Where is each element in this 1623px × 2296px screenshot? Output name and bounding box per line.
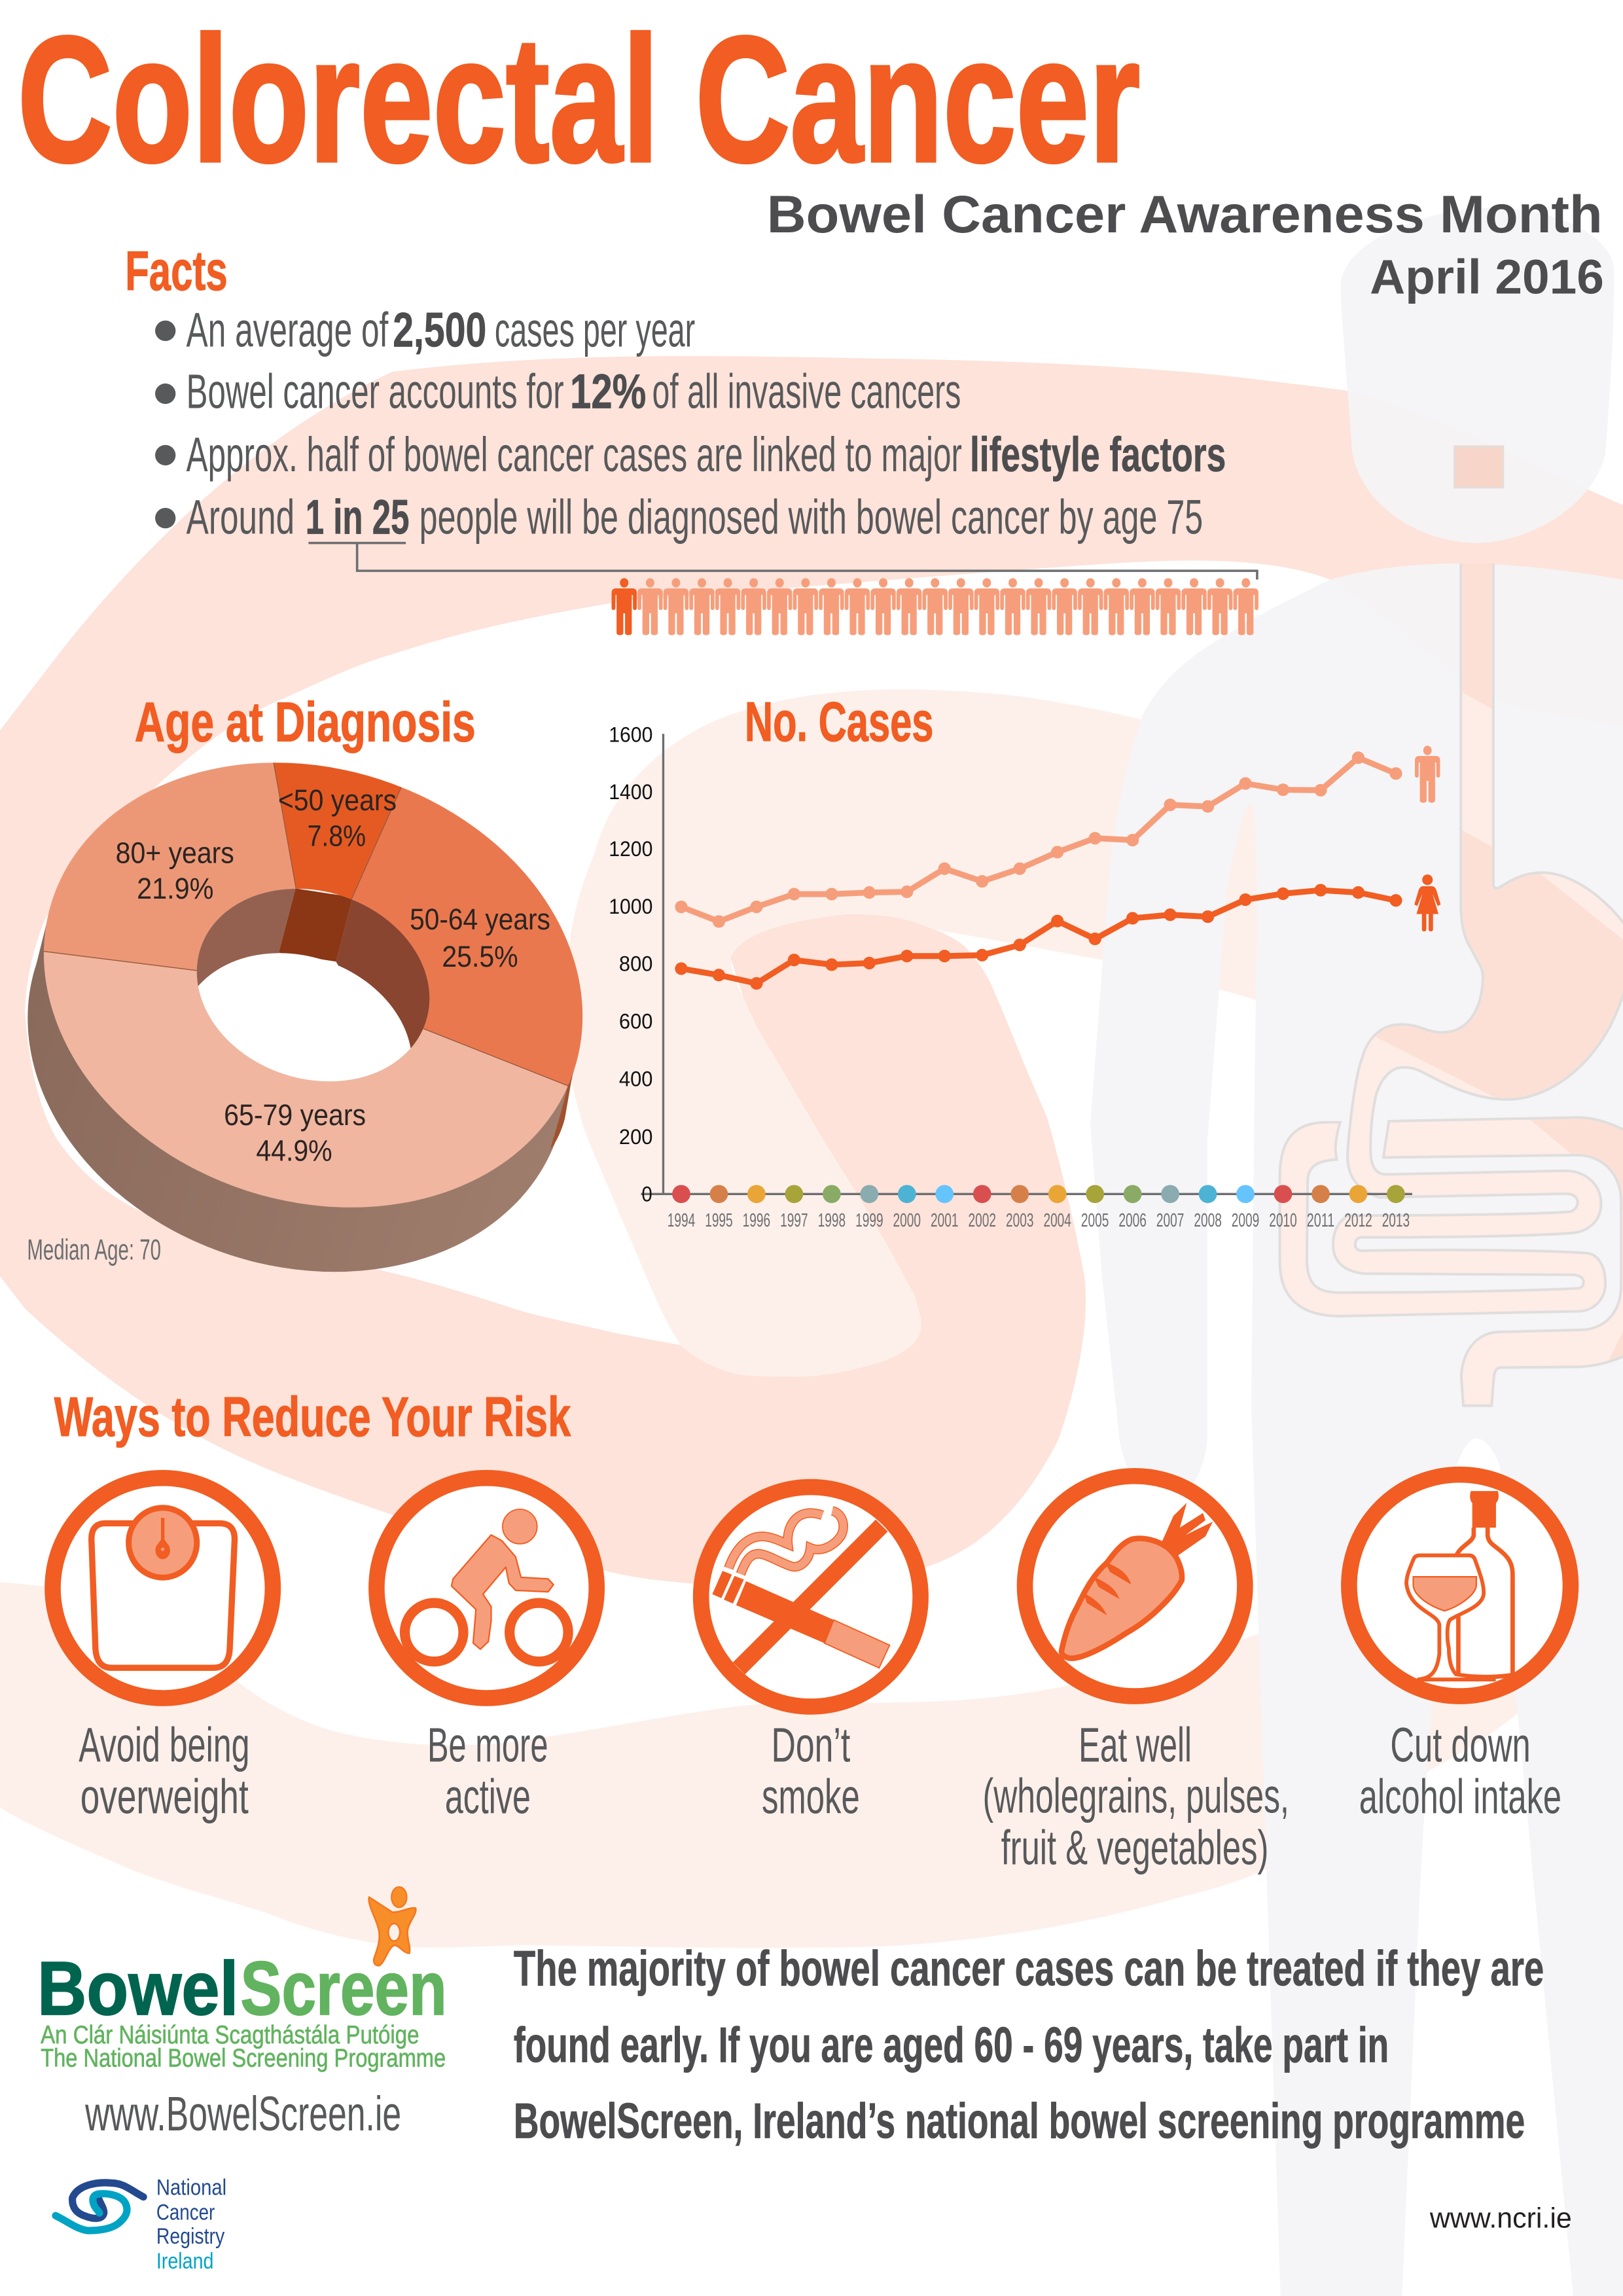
caption: be more active: Be more bbox=[427, 1717, 548, 1772]
organisation name: Ireland bbox=[156, 2249, 213, 2274]
x axis year dots bbox=[672, 1185, 1405, 1203]
organisation name: Registry bbox=[156, 2224, 225, 2249]
y axis labels: 1000 bbox=[609, 895, 652, 918]
x axis year labels: 1997 bbox=[780, 1210, 808, 1231]
background: pale middle band bbox=[569, 689, 1623, 1377]
fact: average cases: An average of bbox=[187, 302, 389, 357]
connector bracket bbox=[308, 543, 1257, 580]
x axis year labels: 1996 bbox=[743, 1210, 770, 1231]
organisation name: National bbox=[156, 2176, 226, 2200]
label: 80 plus: 21.9% bbox=[137, 872, 213, 905]
caption: eat well bbox=[983, 1717, 1289, 1875]
x axis year labels: 2003 bbox=[1006, 1210, 1033, 1231]
caption: don't smoke bbox=[762, 1717, 860, 1823]
y axis labels bbox=[609, 723, 652, 1206]
x axis year labels: 2000 bbox=[893, 1210, 921, 1231]
x axis year labels: 2013 bbox=[1382, 1210, 1410, 1231]
logo: National Cancer Registry Ireland bbox=[56, 2176, 226, 2274]
fact: average cases: cases per year bbox=[495, 302, 695, 357]
icon: cyclist bbox=[376, 1478, 597, 1698]
label: under 50 bbox=[278, 783, 397, 853]
fact: share of invasive cancers: of all invasive cancers bbox=[652, 364, 961, 418]
panel: number of cases bbox=[609, 691, 1440, 1231]
label: 80 plus: 80+ years bbox=[116, 836, 234, 869]
wordmark: BowelScreen bbox=[37, 1946, 447, 2031]
caption: avoid being overweight: Avoid being bbox=[79, 1717, 250, 1772]
background: oesophagus, stomach and intestines bbox=[1280, 556, 1623, 1406]
background: body head silhouette bbox=[1340, 207, 1614, 543]
background: neck square bbox=[1455, 446, 1503, 488]
panel: facts bbox=[125, 240, 1258, 636]
background: body torso, arm and legs silhouette bbox=[1090, 564, 1623, 2296]
x axis year labels: 1999 bbox=[855, 1210, 883, 1231]
y axis labels: 800 bbox=[619, 952, 652, 976]
series: male cases bbox=[675, 751, 1402, 928]
donut side wall bbox=[0, 759, 625, 1340]
subtitle bbox=[767, 185, 1604, 304]
url: ncri website: www.ncri.ie bbox=[1429, 2203, 1572, 2234]
url: BowelScreen website: www.BowelScreen.ie bbox=[84, 2087, 401, 2141]
icon: bathroom scale bbox=[53, 1478, 273, 1698]
icon: swirl bbox=[56, 2183, 143, 2231]
x axis year labels: 1995 bbox=[705, 1210, 733, 1231]
fact: lifestyle factors: Approx. half of bowel cancer cases are linked to major bbox=[187, 427, 962, 482]
y axis labels: 1600 bbox=[609, 723, 652, 746]
icon: no smoking bbox=[701, 1487, 921, 1706]
y axis labels: 400 bbox=[619, 1067, 652, 1091]
x axis year labels: 2008 bbox=[1194, 1210, 1222, 1231]
title: Colorectal Cancer bbox=[18, 0, 1140, 199]
donut slices bbox=[43, 762, 582, 1208]
fact: average cases bbox=[155, 302, 695, 357]
fact: 1 in 25: Around bbox=[187, 490, 294, 545]
donut chart bbox=[27, 762, 582, 1272]
call to action text bbox=[514, 1941, 1544, 2149]
y axis labels: 1400 bbox=[609, 780, 652, 804]
fact: share of invasive cancers: 12% bbox=[570, 364, 646, 418]
x axis year labels: 1998 bbox=[818, 1210, 846, 1231]
fact: 1 in 25: people will be diagnosed with bowel cancer by age 75 bbox=[419, 490, 1203, 545]
donut inner wall and hole bbox=[196, 889, 429, 1081]
caption: don't smoke: Don’t bbox=[772, 1717, 850, 1772]
x axis year labels: 2009 bbox=[1232, 1210, 1259, 1231]
y axis labels: 600 bbox=[619, 1009, 652, 1033]
caption: be more active: active bbox=[445, 1769, 531, 1823]
icon: BowelScreen figure bbox=[369, 1887, 416, 1965]
label: 50-64: 25.5% bbox=[442, 940, 518, 973]
heading: no. cases: No. Cases bbox=[745, 691, 934, 753]
tagline: An Clár Náisiúnta Scagthástála Putóige bbox=[41, 2021, 419, 2049]
y axis labels: 0 bbox=[641, 1183, 652, 1206]
x axis year labels: 2002 bbox=[969, 1210, 996, 1231]
panel: age at diagnosis bbox=[27, 700, 582, 1272]
fact: average cases: 2,500 bbox=[393, 302, 486, 357]
icon: carrot bbox=[1025, 1476, 1245, 1696]
axes bbox=[641, 734, 1412, 1194]
x axis year labels: 1994 bbox=[668, 1210, 695, 1231]
organisation name: Cancer bbox=[156, 2200, 215, 2225]
fact: 1 in 25: 1 in 25 bbox=[306, 490, 409, 545]
heading: facts: Facts bbox=[125, 240, 228, 302]
y axis labels: 1200 bbox=[609, 837, 652, 861]
tagline bbox=[41, 2021, 446, 2073]
label: under 50: 7.8% bbox=[308, 819, 366, 853]
x axis year labels: 2011 bbox=[1307, 1210, 1334, 1231]
icon: female bbox=[1414, 874, 1440, 931]
x axis year labels: 2007 bbox=[1156, 1210, 1184, 1231]
subtitle: Bowel Cancer Awareness Month bbox=[767, 185, 1603, 244]
series: female cases bbox=[675, 884, 1402, 990]
caption: eat well: (wholegrains, pulses, bbox=[983, 1768, 1289, 1823]
caption: avoid being overweight bbox=[79, 1717, 250, 1823]
subtitle: April 2016 bbox=[1370, 249, 1604, 304]
background: large coral spiral band bbox=[0, 356, 1623, 1587]
caption: cut down alcohol intake bbox=[1359, 1717, 1561, 1823]
x axis year labels: 2005 bbox=[1081, 1210, 1109, 1231]
icon: wine bottle and glass bbox=[1349, 1475, 1571, 1696]
note: median age: Median Age: 70 bbox=[27, 1234, 161, 1266]
heading: age at diagnosis: Age at Diagnosis bbox=[135, 692, 476, 754]
tagline: The National Bowel Screening Programme bbox=[41, 2045, 446, 2073]
caption: eat well: Eat well bbox=[1079, 1717, 1192, 1772]
label: 80 plus bbox=[116, 836, 234, 905]
x axis year labels: 2012 bbox=[1344, 1210, 1372, 1231]
y axis labels: 200 bbox=[619, 1125, 652, 1149]
icon: male bbox=[1415, 745, 1440, 803]
fact: lifestyle factors: lifestyle factors bbox=[970, 427, 1226, 482]
wordmark: BowelScreen: Screen bbox=[240, 1946, 447, 2031]
pictogram: 1 in 25 people bbox=[612, 578, 1258, 636]
x axis year labels: 2010 bbox=[1269, 1210, 1297, 1231]
organisation name bbox=[156, 2176, 226, 2274]
label: 50-64 bbox=[410, 903, 550, 973]
label: 50-64: 50-64 years bbox=[410, 903, 550, 936]
caption: be more active bbox=[427, 1717, 548, 1823]
x axis year labels: 2004 bbox=[1043, 1210, 1071, 1231]
caption: avoid being overweight: overweight bbox=[80, 1769, 249, 1823]
heading: ways to reduce your risk: Ways to Reduce Your Risk bbox=[54, 1386, 571, 1448]
label: under 50: <50 years bbox=[278, 783, 397, 817]
label: 65-79: 65-79 years bbox=[224, 1098, 366, 1132]
wordmark: BowelScreen: Bowel bbox=[37, 1946, 239, 2031]
x axis year labels: 2006 bbox=[1118, 1210, 1147, 1231]
x axis year labels: 2001 bbox=[931, 1210, 959, 1231]
line chart bbox=[609, 723, 1440, 1231]
fact: 1 in 25 bbox=[155, 490, 1203, 545]
logo: BowelScreen bbox=[37, 1887, 447, 2073]
caption: cut down alcohol intake: Cut down bbox=[1390, 1717, 1531, 1772]
label: 65-79: 44.9% bbox=[256, 1134, 332, 1167]
fact: share of invasive cancers: Bowel cancer accounts for bbox=[187, 364, 564, 418]
label: 65-79 bbox=[224, 1098, 366, 1167]
background: pale lower band bbox=[0, 1479, 1623, 1948]
caption: eat well: fruit & vegetables) bbox=[1001, 1821, 1268, 1875]
x axis year labels bbox=[668, 1210, 1410, 1231]
caption: don't smoke: smoke bbox=[762, 1769, 860, 1823]
